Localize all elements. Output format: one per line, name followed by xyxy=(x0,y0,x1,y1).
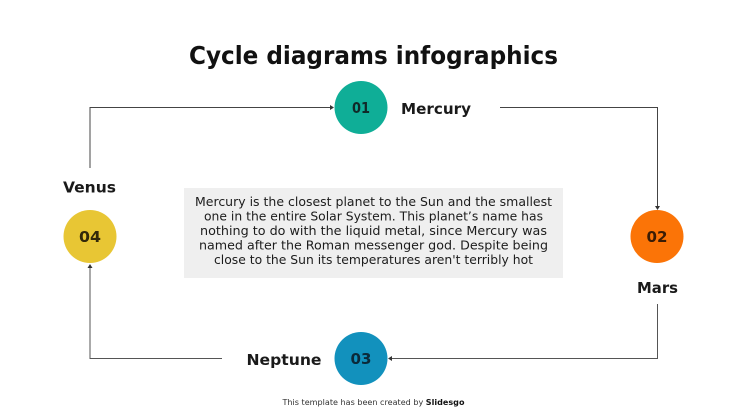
arrow: Mars to Neptune xyxy=(388,304,658,361)
description panel: named after the Roman messenger god. Despite being xyxy=(199,238,548,252)
node 03 Neptune: 03 xyxy=(350,350,372,368)
node 02 Mars: 02 xyxy=(646,228,668,246)
node 04 Venus xyxy=(63,178,116,263)
node 03 Neptune: Neptune xyxy=(246,351,322,369)
title: Cycle diagrams infographics xyxy=(189,41,558,70)
description panel: close to the Sun its temperatures aren't terribly hot xyxy=(214,253,533,267)
description panel: nothing to do with the liquid metal, since Mercury was xyxy=(200,224,547,238)
description panel xyxy=(184,188,563,278)
node 01 Mercury xyxy=(334,81,471,134)
node 03 Neptune xyxy=(246,332,388,385)
node 02 Mars xyxy=(630,210,684,297)
description panel: one in the entire Solar System. This planet’s name has xyxy=(204,210,543,224)
arrow: Neptune to Venus xyxy=(88,264,222,358)
node 01 Mercury: 01 xyxy=(352,99,370,117)
arrow: Venus to Mercury xyxy=(90,105,334,168)
footer credit: This template has been created by Slidesgo xyxy=(281,398,464,407)
node 02 Mars: Mars xyxy=(637,279,678,297)
node 01 Mercury: Mercury xyxy=(401,100,471,118)
node 04 Venus: Venus xyxy=(63,178,116,196)
arrow: Mercury to Mars xyxy=(500,108,660,210)
description panel: Mercury is the closest planet to the Sun and the smallest xyxy=(195,195,552,209)
node 04 Venus: 04 xyxy=(79,228,101,246)
